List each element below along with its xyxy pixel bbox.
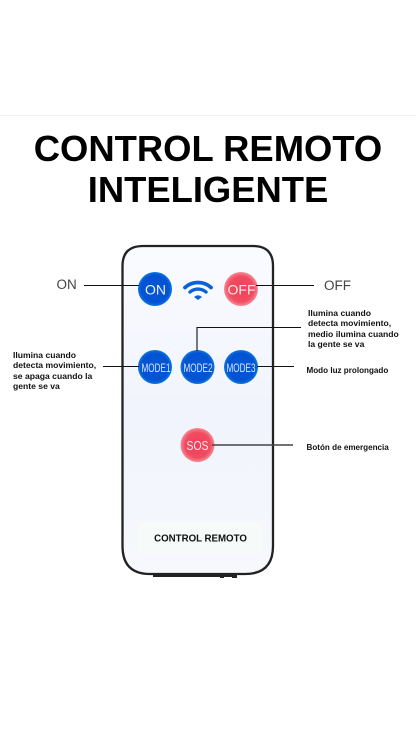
- text: mode 2 description: [308, 308, 399, 349]
- remote body: [122, 246, 273, 578]
- text: mode 1 description: Ilumina cuando: [13, 350, 76, 360]
- label plate: [138, 522, 262, 554]
- button: SOS: [180, 428, 214, 462]
- label plate: CONTROL REMOTO: [154, 534, 247, 544]
- button: SOS: SOS: [186, 438, 209, 453]
- icon: wifi: [185, 283, 211, 300]
- text: mode 1 description: gente se va: [13, 381, 60, 391]
- text: mode 2 description: medio ilumina cuando: [308, 329, 399, 339]
- text: mode 1 description: se apaga cuando la: [13, 371, 92, 381]
- label: OFF: OFF: [324, 278, 351, 293]
- text: mode 2 description: detecta movimiento,: [308, 318, 391, 328]
- leader lines: [84, 286, 314, 445]
- text: mode 3 description: Modo luz prolongado: [306, 366, 388, 375]
- button: MODE2: [180, 350, 214, 384]
- text: SOS description: Botón de emergencia: [306, 443, 389, 452]
- button: ON: ON: [145, 282, 166, 298]
- title: CONTROL REMOTO: [34, 128, 382, 169]
- text: mode 1 description: [13, 350, 96, 391]
- label: ON: ON: [56, 277, 77, 292]
- title: [34, 128, 382, 210]
- button: OFF: OFF: [228, 282, 256, 298]
- text: mode 2 description: Ilumina cuando: [308, 308, 371, 318]
- button: MODE1: [138, 350, 172, 384]
- button: MODE2: MODE2: [184, 361, 213, 375]
- button: MODE3: [224, 350, 258, 384]
- text: mode 2 description: la gente se va: [308, 339, 364, 349]
- button: MODE3: MODE3: [226, 361, 256, 375]
- button: OFF: [224, 272, 258, 306]
- button: MODE1: MODE1: [142, 361, 171, 375]
- text: mode 1 description: detecta movimiento,: [13, 360, 96, 370]
- top divider: [0, 115, 416, 116]
- title: INTELIGENTE: [88, 169, 328, 210]
- button: ON: [138, 272, 172, 306]
